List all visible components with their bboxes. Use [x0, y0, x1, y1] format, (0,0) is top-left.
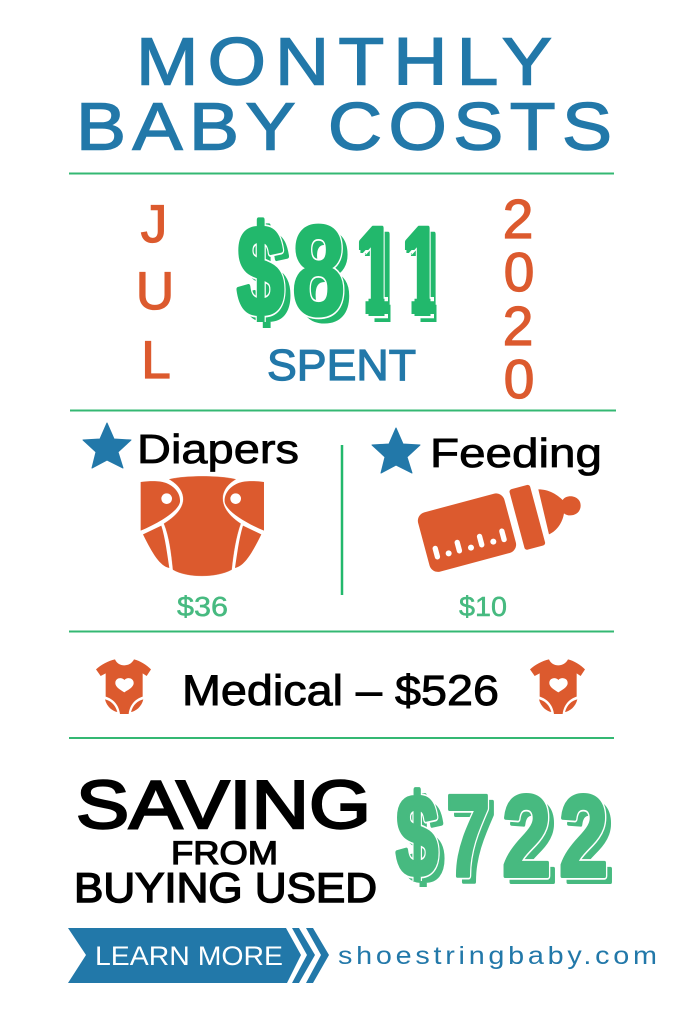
label: SPENT: SPENT [267, 341, 416, 390]
savings amount: $722: $ [396, 771, 438, 901]
month: JUL: L [141, 331, 171, 390]
savings amount: $722 [395, 787, 612, 887]
button: learn more arrow: LEARN MORE [95, 941, 283, 971]
total amount: $811: 1 [356, 203, 396, 341]
total amount: $811 [236, 217, 436, 328]
infographic [68, 36, 656, 983]
website url: shoestringbaby.com [338, 942, 657, 970]
title: BABY COSTS [76, 90, 612, 165]
savings amount: $722: 7 [446, 771, 490, 901]
savings text: FROM [171, 835, 278, 871]
panel: diapers [83, 423, 299, 622]
savings amount: $722: 2 [559, 771, 608, 901]
month: JUL: J [141, 195, 167, 254]
heading: Feeding: Feeding [430, 430, 602, 476]
savings amount: $722: $ [396, 771, 438, 901]
total amount: $811: 8 [292, 200, 345, 343]
panel: medical [96, 659, 585, 715]
title [76, 25, 612, 165]
total amount: $811: $ [237, 200, 284, 343]
total amount: $811: 8 [298, 206, 351, 349]
year: 2020: 2 [503, 295, 533, 357]
savings amount: $722: 2 [508, 777, 557, 907]
amount: $36: $36 [177, 591, 228, 622]
month: JUL: U [136, 262, 174, 321]
savings text: BUYING USED [74, 864, 377, 911]
savings text: SAVING [76, 767, 371, 843]
total amount: $811: 1 [402, 203, 442, 341]
total amount: $811: 1 [408, 209, 448, 347]
year: 2020 [503, 188, 534, 410]
total amount: $811: 8 [292, 200, 345, 343]
savings text [74, 767, 377, 911]
icon: star [372, 428, 420, 473]
total amount: $811: 1 [356, 203, 396, 341]
amount: $10: $10 [459, 591, 507, 622]
icon: onesie right [530, 659, 585, 714]
heading: Diapers: Diapers [137, 426, 299, 472]
icon: onesie left [96, 659, 151, 714]
savings amount: $722: 2 [502, 771, 551, 901]
savings amount: $722: 2 [559, 771, 608, 901]
month: JUL [136, 195, 174, 390]
savings amount: $722: $ [402, 777, 444, 907]
total amount: $811: $ [243, 206, 290, 349]
year: 2020: 2 [503, 188, 533, 250]
icon: star [83, 423, 131, 468]
label: Medical – $526: Medical – $526 [182, 667, 499, 715]
total amount: $811: $ [237, 200, 284, 343]
year: 2020: 0 [504, 241, 534, 303]
total amount: $811: 1 [362, 209, 402, 347]
total amount: $811: 1 [402, 203, 442, 341]
year: 2020: 0 [504, 348, 534, 410]
savings amount: $722: 7 [446, 771, 490, 901]
title: MONTHLY [136, 25, 552, 100]
savings amount: $722: 2 [565, 777, 614, 907]
savings amount: $722: 7 [452, 777, 496, 907]
icon: baby bottle [416, 484, 581, 574]
savings amount: $722: 2 [502, 771, 551, 901]
button: learn more arrow [68, 928, 329, 983]
icon: diaper [141, 476, 264, 576]
panel: feeding [372, 428, 602, 622]
